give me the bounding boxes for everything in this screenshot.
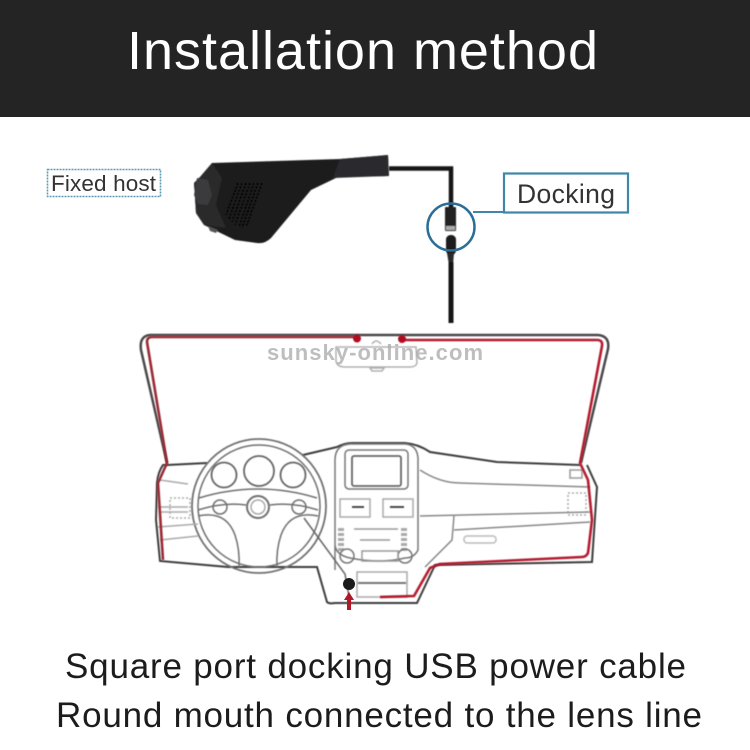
- watermark: sunsky-online.com: [267, 340, 483, 365]
- steering wheel: [192, 439, 326, 573]
- label: docking: Docking: [517, 179, 615, 209]
- wire clips at mirror: [353, 334, 361, 342]
- windshield outline: [141, 335, 608, 463]
- power cable with connector: [389, 168, 456, 323]
- title: Installation method: [127, 21, 598, 81]
- caption text: Round mouth connected to the lens line: [56, 696, 702, 735]
- dashboard outline: [156, 443, 597, 603]
- power socket and red arrow: [343, 578, 355, 610]
- rear-view mirror: [336, 341, 417, 371]
- label: docking: [504, 174, 628, 212]
- caption text: [56, 647, 702, 735]
- icon: dash camera: [194, 155, 389, 243]
- label: fixed host: Fixed host: [51, 171, 157, 196]
- passenger dash lines: [420, 470, 590, 567]
- instrument gauges: [212, 456, 306, 488]
- caption text: Square port docking USB power cable: [65, 647, 686, 686]
- left and right air vents: [158, 470, 586, 540]
- camera vent grille: [226, 183, 262, 228]
- callout: docking circle and leader: [428, 204, 505, 250]
- car interior line drawing: [141, 335, 608, 603]
- red wiring route: [147, 334, 602, 597]
- header banner: [0, 0, 750, 117]
- centre console: [304, 444, 418, 602]
